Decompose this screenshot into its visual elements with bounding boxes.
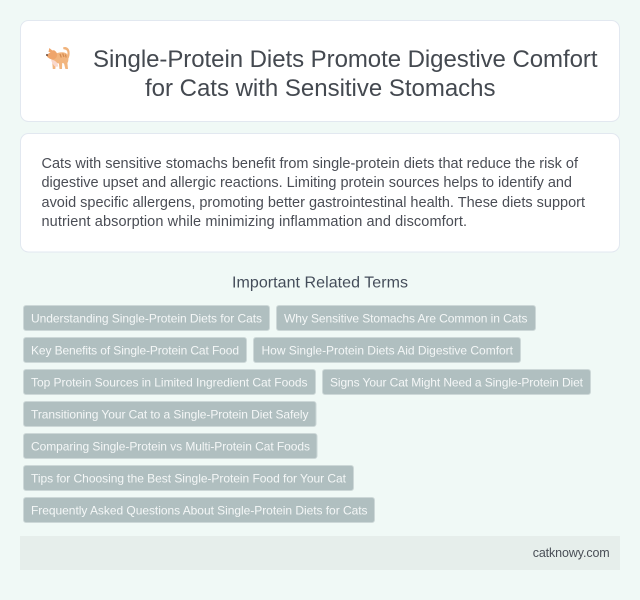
tag: transitioning safely — [24, 402, 316, 426]
tag: comparing foods: Comparing Single-Protein vs Multi-Protein Cat Foods — [31, 439, 310, 453]
tag: digestive comfort: How Single-Protein Diets Aid Digestive Comfort — [262, 343, 514, 357]
heading: main title: for Cats with Sensitive Stomachs — [145, 75, 496, 102]
tag: key benefits — [24, 338, 246, 362]
text block: summary paragraph — [42, 156, 585, 230]
tag: why sensitive stomachs — [276, 306, 536, 330]
tag: tips for choosing — [24, 466, 354, 490]
tag: understanding diets — [24, 306, 270, 330]
tag: frequently asked questions: Frequently Asked Questions About Single-Protein Diets for Cats — [31, 503, 368, 517]
heading: main title: Single-Protein Diets Promote Digestive Comfort — [93, 46, 598, 73]
tag: comparing foods — [24, 434, 317, 458]
panel: summary text card — [20, 134, 620, 252]
tag: signs your cat needs diet — [322, 370, 590, 394]
footer bar — [20, 536, 620, 570]
text block: summary paragraph: avoid specific allergens, promoting better gastrointestinal health. These diets support — [42, 195, 585, 211]
tag: top protein sources: Top Protein Sources in Limited Ingredient Cat Foods — [31, 375, 308, 389]
tag: frequently asked questions — [24, 498, 374, 522]
icon: orange cat — [46, 47, 70, 69]
panel: title card — [20, 20, 620, 122]
tag: digestive comfort — [254, 338, 520, 362]
tag: top protein sources — [24, 370, 316, 394]
tag: why sensitive stomachs: Why Sensitive Stomachs Are Common in Cats — [284, 311, 528, 325]
tag list: related terms — [24, 306, 590, 522]
tag: tips for choosing: Tips for Choosing the Best Single-Protein Food for Your Cat — [31, 471, 347, 485]
footer: site name: catknowy.com — [533, 546, 610, 560]
tag: signs your cat needs diet: Signs Your Cat Might Need a Single-Protein Diet — [330, 375, 584, 389]
heading: main title — [93, 46, 598, 102]
text block: summary paragraph: nutrient absorption while minimizing inflammation and discomfort. — [42, 214, 467, 230]
tag: key benefits: Key Benefits of Single-Protein Cat Food — [31, 343, 239, 357]
tag: transitioning safely: Transitioning Your Cat to a Single-Protein Diet Safely — [31, 407, 308, 421]
text block: summary paragraph: Cats with sensitive stomachs benefit from single-protein diets that reduce the risk of — [42, 156, 579, 172]
tag: understanding diets: Understanding Single-Protein Diets for Cats — [31, 311, 262, 325]
heading: important related terms: Important Related Terms — [232, 274, 408, 292]
text block: summary paragraph: digestive upset and allergic reactions. Limiting protein sources helps to identify and — [42, 175, 572, 191]
